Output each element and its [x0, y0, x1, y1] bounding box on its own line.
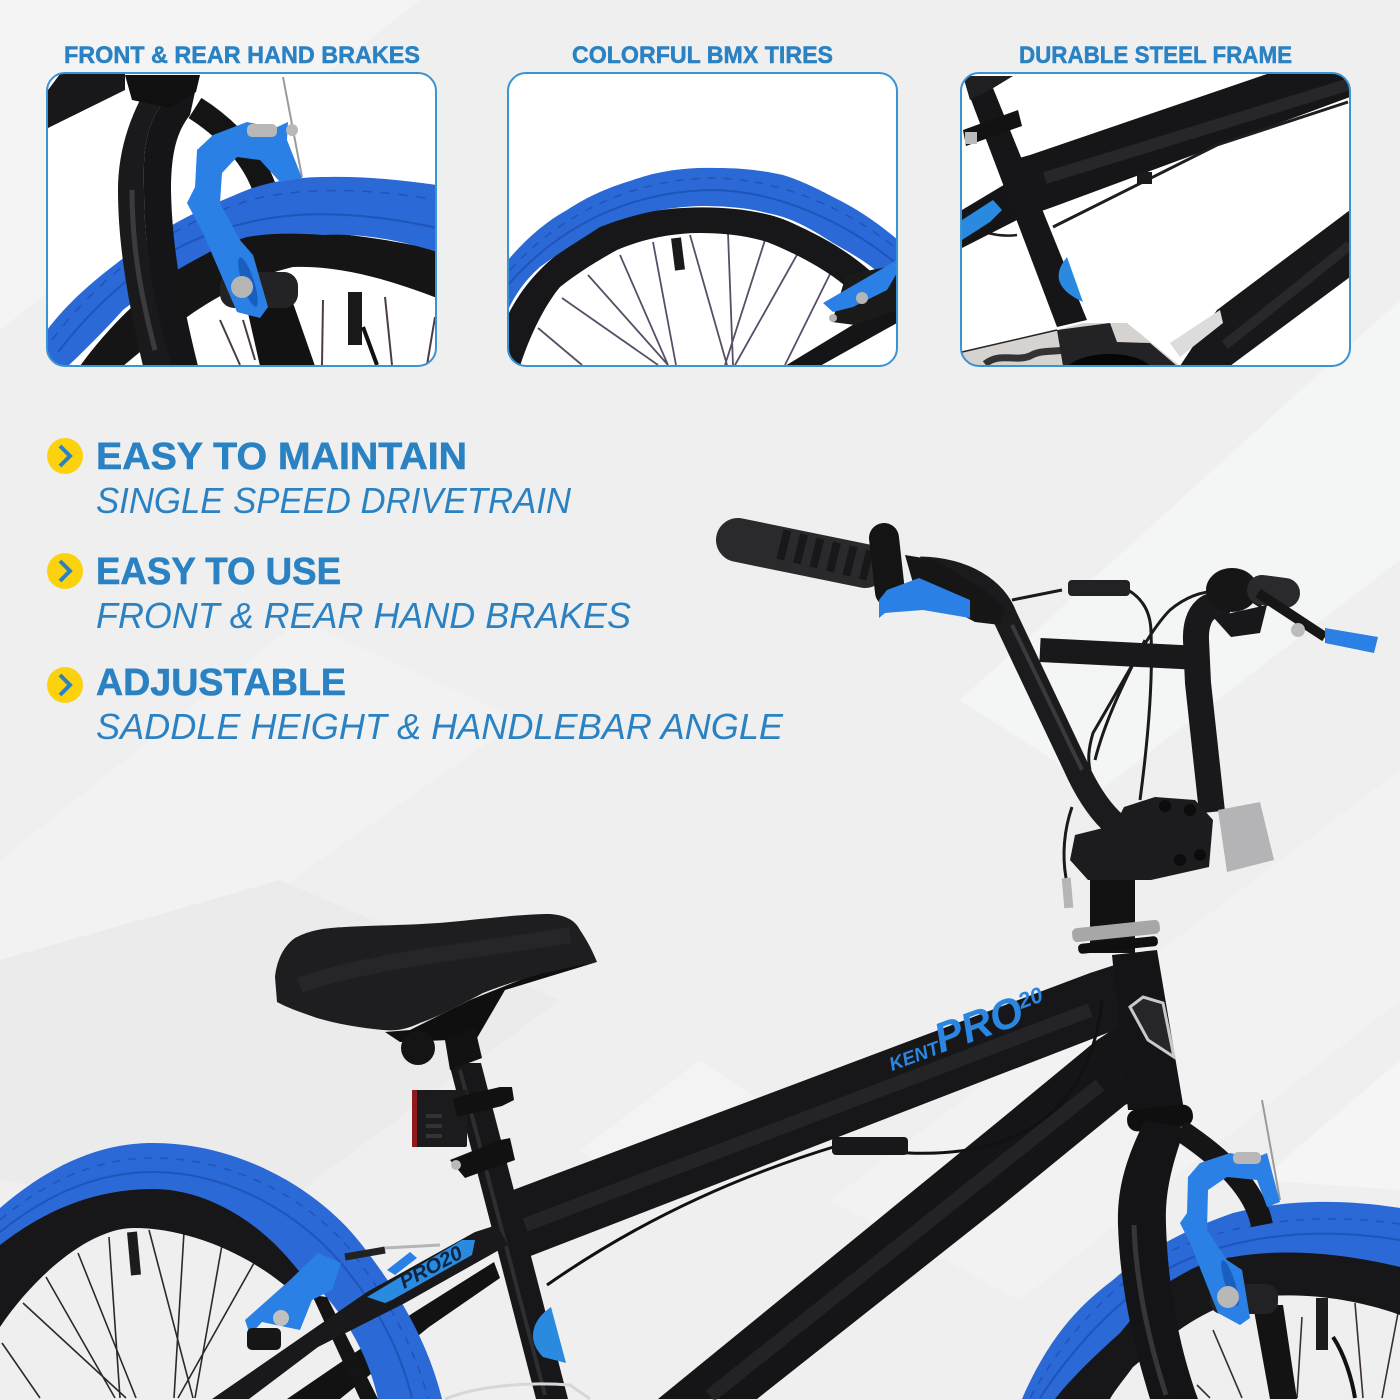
feature: adjustable: SADDLE HEIGHT & HANDLEBAR ANGLE — [96, 706, 784, 747]
brake pad — [1210, 1284, 1278, 1314]
right grip — [1206, 568, 1285, 612]
cable adjuster — [1068, 580, 1130, 596]
headset ring — [1078, 936, 1158, 954]
handlebar crossbar — [1040, 650, 1200, 658]
left lever clamp — [905, 555, 1005, 625]
stem bolts — [1159, 800, 1206, 866]
photo frame — [961, 73, 1350, 366]
front tire — [1022, 1202, 1400, 1399]
photo frame — [508, 73, 897, 366]
stem — [1070, 797, 1213, 880]
seat tube highlight — [460, 1070, 545, 1395]
seat post upper clamp — [453, 1087, 514, 1117]
lower headset collar — [1126, 1104, 1194, 1132]
rear reflector — [412, 1090, 467, 1147]
head tube — [1112, 950, 1184, 1110]
seat post lower clamp — [450, 1138, 515, 1178]
seat clamp bolt — [401, 1031, 435, 1065]
feature: adjustable: ADJUSTABLE — [96, 662, 346, 704]
brake cables — [1012, 590, 1265, 878]
right brake lever — [1325, 628, 1378, 653]
chain guard edge — [445, 1384, 590, 1399]
frame logo text: 20 — [1014, 982, 1047, 1014]
down tube highlight — [710, 1085, 1100, 1396]
feature: easy to maintain — [47, 436, 572, 521]
seat stay — [212, 1225, 508, 1399]
top tube — [505, 960, 1135, 1257]
front wheel spokes — [1197, 1303, 1398, 1398]
feature: easy to maintain: SINGLE SPEED DRIVETRAIN — [96, 480, 572, 521]
steerer — [1090, 878, 1135, 953]
brake wire — [1262, 1100, 1280, 1200]
top tube highlight — [525, 1010, 1090, 1225]
panel: colorful BMX tires — [508, 42, 898, 366]
bike illustration — [0, 538, 1400, 1399]
handlebar right rise — [1196, 605, 1232, 812]
collar bolt — [451, 1160, 461, 1170]
seat tube badge — [533, 1307, 566, 1363]
feature: adjustable — [47, 662, 784, 747]
handlebar left rise — [920, 569, 1165, 848]
photo: frame close-up — [961, 73, 1350, 366]
feature: easy to use: FRONT & REAR HAND BRAKES — [96, 595, 631, 636]
feature: easy to maintain: EASY TO MAINTAIN — [96, 436, 467, 478]
right lever arm — [1258, 593, 1325, 637]
rear wheel valve — [132, 1232, 136, 1275]
rear brake — [245, 1245, 440, 1350]
rear tire tread lines — [0, 1158, 428, 1398]
panel: durable steel frame — [961, 42, 1350, 366]
far fork leg — [1180, 1130, 1262, 1225]
front wheel cable — [1333, 1337, 1355, 1398]
frame logo text: KENTPRO — [887, 986, 1029, 1076]
front tire tread lines — [1030, 1219, 1400, 1398]
left bar highlight — [1012, 625, 1082, 770]
panel: front and rear hand brakes — [47, 42, 437, 366]
rear tire — [0, 1143, 442, 1399]
down tube — [658, 1015, 1140, 1399]
right lever silver — [1291, 623, 1305, 637]
feature: easy to use — [47, 551, 631, 636]
seat tube — [449, 1063, 568, 1399]
rear rim and inner tire — [0, 1185, 305, 1327]
front rim and inner tire — [1040, 1246, 1400, 1399]
front wheel valve — [1316, 1298, 1328, 1350]
saddle underside rails — [385, 962, 597, 1042]
seat stay sticker: PRO20 — [396, 1242, 466, 1293]
brake cable — [547, 1000, 1102, 1285]
headset washer — [1072, 919, 1160, 943]
saddle highlight — [300, 935, 570, 985]
seat post head — [445, 1028, 482, 1070]
fork highlight — [1134, 1225, 1166, 1395]
rear lower stay — [287, 1262, 500, 1399]
left grip — [738, 538, 890, 592]
frame tubes — [212, 950, 1184, 1399]
heading: tires: COLORFUL BMX TIRES — [572, 42, 833, 69]
photo: tire close-up — [508, 73, 898, 366]
feature list — [47, 436, 784, 747]
front reflector — [1218, 802, 1274, 872]
rear tire inner wall — [312, 1295, 378, 1399]
cable ferrule — [1062, 878, 1073, 908]
seat stay sticker — [367, 1240, 475, 1303]
feature: easy to use: EASY TO USE — [96, 551, 341, 593]
heading: hand brakes: FRONT & REAR HAND BRAKES — [64, 42, 420, 69]
front brake — [1180, 1152, 1280, 1325]
far fork leg lower — [1253, 1305, 1297, 1399]
photo frame — [47, 73, 436, 366]
fork — [1118, 1120, 1198, 1399]
saddle — [275, 914, 597, 1030]
right lever clamp — [1213, 605, 1267, 637]
head badge — [1130, 997, 1174, 1057]
photo: brake close-up — [47, 73, 437, 366]
heading: frame: DURABLE STEEL FRAME — [1019, 42, 1292, 69]
cable housing — [832, 1137, 908, 1155]
left brake lever — [879, 578, 970, 618]
rear wheel spokes — [2, 1230, 254, 1398]
